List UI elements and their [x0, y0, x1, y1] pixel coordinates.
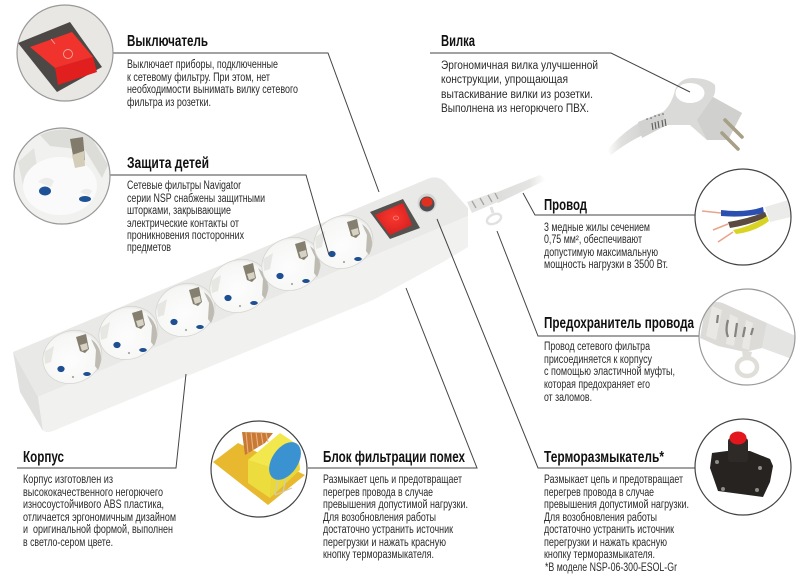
text block: износоустойчивого ABS пластика, — [23, 499, 164, 511]
section: cord protector — [544, 315, 694, 404]
heading: Корпус — [23, 449, 64, 466]
heading: Провод — [544, 197, 587, 214]
text block: шторками, закрывающие — [127, 205, 231, 217]
thermal breaker button — [418, 194, 436, 212]
section: cord — [544, 197, 668, 271]
heading: Выключатель — [127, 33, 208, 50]
text block — [544, 341, 675, 404]
text block: серии NSP снабжены защитными — [127, 193, 265, 205]
text block: *В моделе NSP-06-300-ESOL-Gr — [545, 562, 677, 574]
text block: допустимую максимальную — [544, 247, 658, 259]
text block: Эргономичная вилка улучшенной — [441, 60, 598, 72]
text block: кнопку терморазмыкателя. — [323, 549, 434, 561]
text block: конструкции, упрощающая — [441, 74, 568, 86]
cord strain relief with loop — [467, 192, 503, 226]
text block — [323, 474, 468, 561]
section: thermal breaker — [544, 449, 689, 574]
text block: превышения допустимой нагрузки. — [323, 499, 468, 511]
text block: 3 медные жилы сечением — [544, 222, 650, 234]
text block: достаточно устранить источник — [323, 524, 454, 536]
power cord — [490, 175, 546, 203]
text block: к сетевому фильтру. При этом, нет — [127, 72, 271, 84]
text block: перегрев провода в случае — [544, 487, 654, 499]
text block: Для возобновления работы — [544, 512, 657, 524]
text block: необходимости вынимать вилку сетевого — [127, 84, 298, 96]
section: filter block — [323, 449, 468, 561]
heading: Терморазмыкатель* — [544, 449, 665, 466]
text block: в светло-сером цвете. — [23, 537, 113, 549]
section: housing — [23, 449, 176, 549]
red switch — [370, 199, 420, 239]
text block: кнопку терморазмыкателя. — [544, 549, 655, 561]
text block — [127, 180, 265, 254]
text block — [23, 474, 176, 549]
text block — [127, 59, 298, 109]
heading: Защита детей — [127, 155, 209, 172]
icon circle: filter block — [211, 421, 308, 517]
text block: Для возобновления работы — [323, 512, 436, 524]
text block: с помощью эластичной муфты, — [544, 366, 675, 378]
icon circle: thermal breaker — [695, 419, 791, 515]
power strip — [13, 177, 468, 432]
text block: предметов — [127, 242, 171, 254]
text block: достаточно устранить источник — [544, 524, 675, 536]
section: child protection — [127, 155, 265, 254]
heading: Блок фильтрации помех — [323, 449, 465, 466]
text block: Размыкает цепь и предотвращает — [323, 474, 463, 486]
plug — [607, 78, 742, 155]
text block: от заломов. — [544, 392, 592, 404]
icon circle: strain relief — [699, 289, 800, 385]
sockets — [35, 207, 381, 392]
text block: Размыкает цепь и предотвращает — [544, 474, 684, 486]
text block: и оригинальной формой, выполнен — [23, 524, 173, 536]
text block: Провод сетевого фильтра — [544, 341, 650, 353]
text block — [441, 60, 598, 115]
text block: высококачественного негорючего — [23, 487, 163, 499]
text block: проникновения посторонних — [127, 230, 244, 242]
text block: отличается эргономичным дизайном — [23, 512, 176, 524]
text block: Выполнена из негорючего ПВХ. — [441, 103, 589, 115]
text block — [544, 222, 668, 271]
text block: мощность нагрузки в 3500 Вт. — [544, 259, 668, 271]
text block: фильтра из розетки. — [127, 97, 211, 109]
text block: которая предохраняет его — [544, 379, 650, 391]
text block: перегрев провода в случае — [323, 487, 433, 499]
icon circle: wires — [695, 169, 795, 265]
icon circle: rocker switch — [17, 5, 113, 101]
text block — [544, 474, 689, 574]
section: switch — [127, 33, 298, 109]
heading: Предохранитель провода — [544, 315, 694, 332]
text block: превышения допустимой нагрузки. — [544, 499, 689, 511]
heading: Вилка — [441, 33, 475, 50]
text block: Выключает приборы, подключенные — [127, 59, 278, 71]
text block: электрические контакты от — [127, 218, 240, 230]
text block: перегрузки и нажать красную — [323, 537, 446, 549]
icon circle: socket shutter — [14, 128, 110, 224]
text block: вытаскивание вилки из розетки. — [441, 89, 593, 101]
strip body — [13, 177, 468, 432]
text block: 0,75 мм², обеспечивают — [544, 234, 643, 246]
text block: перегрузки и нажать красную — [544, 537, 667, 549]
leader lines — [17, 53, 702, 468]
text block: Сетевые фильтры Navigator — [127, 180, 241, 192]
text block: Корпус изготовлен из — [23, 474, 113, 486]
text block: присоединяется к корпусу — [544, 354, 652, 366]
section: plug — [441, 33, 598, 115]
